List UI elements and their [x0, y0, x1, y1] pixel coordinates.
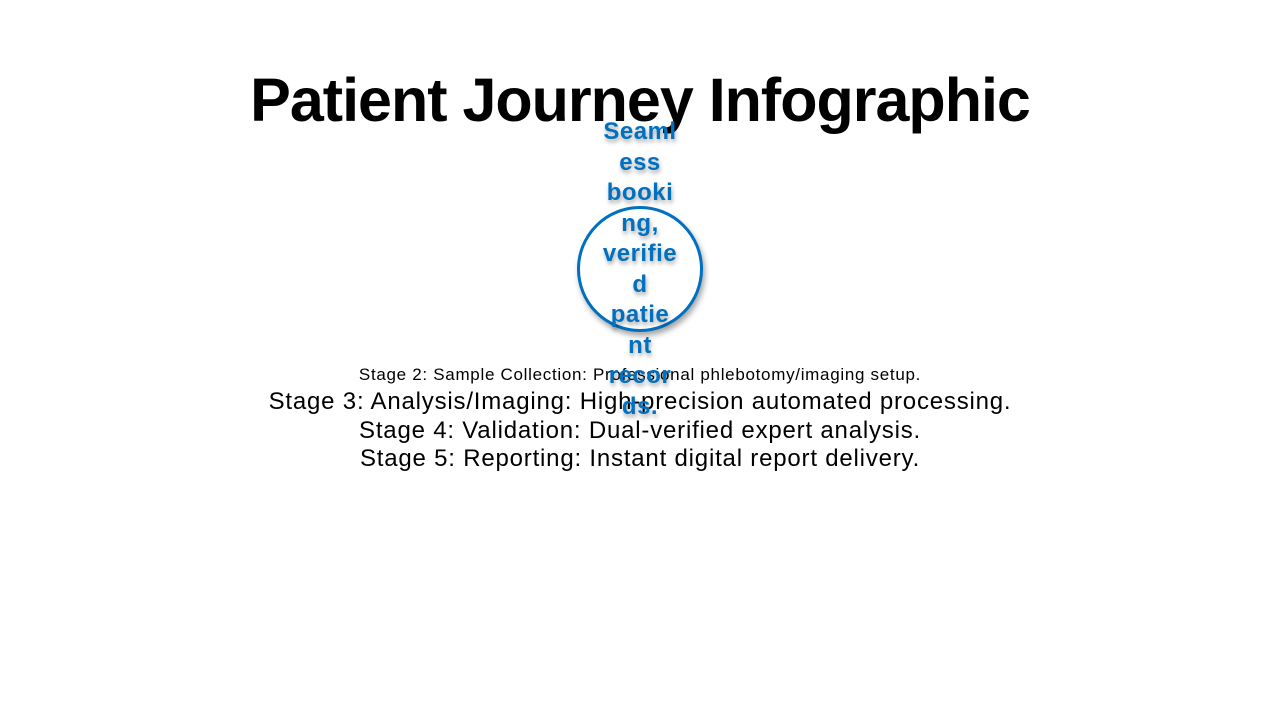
stage 1 circle label	[602, 118, 679, 420]
stages 3-5 text: Stage 4: Validation: Dual-verified expert analysis.	[359, 416, 921, 444]
stage 1 circle label: ng,	[621, 210, 659, 236]
stage 1 circle label: Seaml	[603, 118, 677, 145]
stage 1 circle label: recor	[609, 362, 671, 389]
stage 1 circle label: nt	[628, 332, 652, 358]
stage 1 circle label: d	[632, 270, 648, 298]
stages 3-5 text	[269, 388, 1011, 472]
icon: stage 1 circle	[577, 206, 703, 332]
title: Patient Journey Infographic	[250, 66, 1030, 134]
stage 1 circle label: verifie	[603, 240, 677, 267]
stage 2 text: Stage 2: Sample Collection: Professional phlebotomy/imaging setup.	[359, 365, 921, 384]
stage 1 circle label: ds.	[622, 392, 658, 420]
stages 3-5 text: Stage 5: Reporting: Instant digital report delivery.	[360, 445, 920, 472]
stage 1 circle label: patie	[611, 301, 669, 328]
stage 1 circle label: ess	[619, 148, 661, 176]
stage 1 circle label: booki	[607, 179, 673, 206]
stages 3-5 text: Stage 3: Analysis/Imaging: High-precision automated processing.	[269, 388, 1011, 415]
